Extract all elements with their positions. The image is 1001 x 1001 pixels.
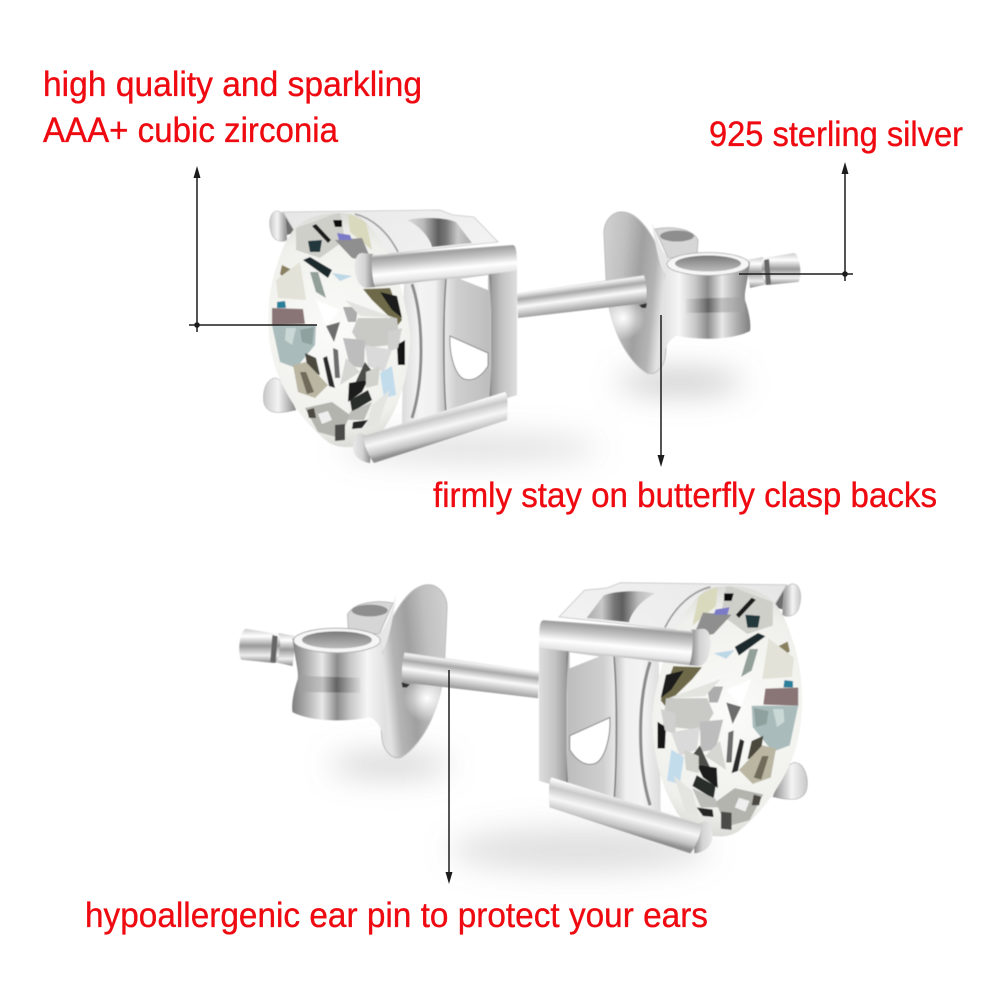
back wedge: [283, 214, 300, 236]
arrow: [660, 315, 662, 458]
arch recess: [407, 218, 472, 247]
window opening: [450, 336, 488, 380]
disc to clasp link: [652, 222, 672, 278]
top front prong: [355, 245, 517, 288]
back prong: lower left: [264, 378, 296, 412]
window upper light: [460, 275, 488, 290]
setting body: [402, 271, 517, 430]
clasp rim: [667, 252, 749, 276]
rear cup: [655, 228, 698, 258]
clasp disc: [604, 212, 667, 374]
facets: [272, 212, 405, 441]
arch inner line: [355, 214, 398, 252]
label text: high quality and sparkling: [43, 65, 422, 104]
label text: firmly stay on butterfly clasp backs: [433, 476, 937, 515]
prong cap: [353, 433, 372, 463]
clasp band: [686, 297, 745, 313]
head and prongs: [264, 210, 517, 430]
window: [445, 274, 490, 414]
back prong: upper left: [270, 211, 287, 241]
callout: sterling silver: [709, 115, 963, 281]
rear cup opening: [660, 230, 694, 242]
arrow: [448, 670, 450, 874]
prong bar: [363, 392, 508, 463]
arrowhead: [658, 455, 664, 467]
window frame line: [444, 274, 492, 414]
ear pin: [517, 275, 647, 318]
rear arch: [283, 210, 498, 258]
prong bar: [372, 245, 517, 287]
prong cap: [355, 253, 375, 288]
dot: [194, 322, 200, 328]
label text: 925 sterling silver: [709, 115, 963, 154]
arrowhead: [842, 162, 848, 174]
clasp cup body: [662, 262, 750, 362]
arrow: [189, 176, 317, 332]
disc highlight: [601, 298, 645, 342]
arrowhead: [446, 872, 452, 884]
tip groove: [764, 259, 771, 285]
butterfly clasp back: [517, 212, 800, 374]
label text line 2: AAA+ cubic zirconia: [43, 111, 339, 150]
right column: [491, 271, 517, 402]
arrowhead: [194, 166, 200, 178]
gem: [260, 205, 415, 455]
callout: butterfly clasp: [433, 315, 937, 515]
clasp opening: [675, 256, 741, 272]
dot: [842, 271, 848, 277]
earring: top, gem facing left: [260, 205, 800, 463]
callout: ear pin: [85, 670, 708, 935]
earring: bottom, gem facing right: [239, 577, 811, 853]
left column: [402, 279, 446, 428]
pin hole: [639, 303, 647, 308]
label text: hypoallergenic ear pin to protect your ears: [85, 896, 708, 935]
soft shadows under earrings: [330, 371, 742, 872]
clasp neck: [746, 257, 768, 288]
callout: cubic zirconia: [43, 65, 422, 332]
clasp tip: [762, 253, 800, 285]
bottom front prong: [353, 392, 508, 463]
column crescent: [412, 284, 421, 418]
arrow: [739, 172, 853, 281]
